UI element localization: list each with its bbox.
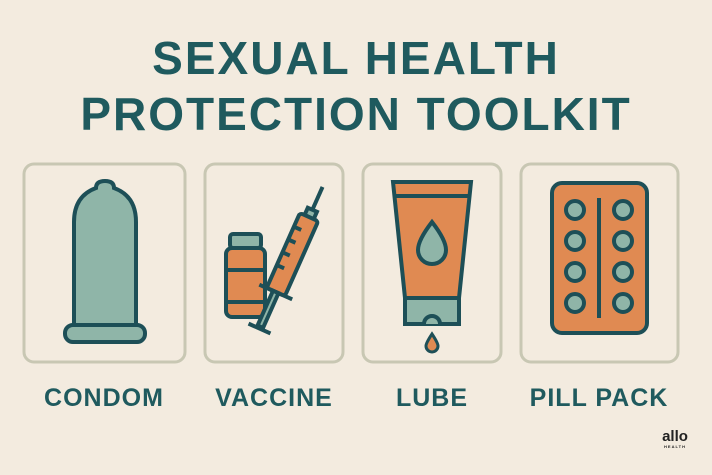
panel: pill pack [521,164,678,362]
label: lube: LUBE [396,384,468,412]
icon: condom [65,181,145,342]
icon: lube tube [393,182,471,352]
title: PROTECTION TOOLKIT [80,88,632,140]
logo: HEALTH [664,444,686,449]
icon: pill pack [552,183,647,333]
icon: syringe [243,180,339,336]
title [80,32,632,140]
label: vaccine: VACCINE [215,384,333,412]
icon: vial [226,234,265,317]
panel: lube [363,164,501,362]
label: pill pack: PILL PACK [530,384,668,412]
label: condom: CONDOM [44,384,164,412]
logo: allo [662,428,688,445]
panel: condom [24,164,185,362]
title: SEXUAL HEALTH [152,32,560,84]
panel: vaccine [205,164,343,362]
